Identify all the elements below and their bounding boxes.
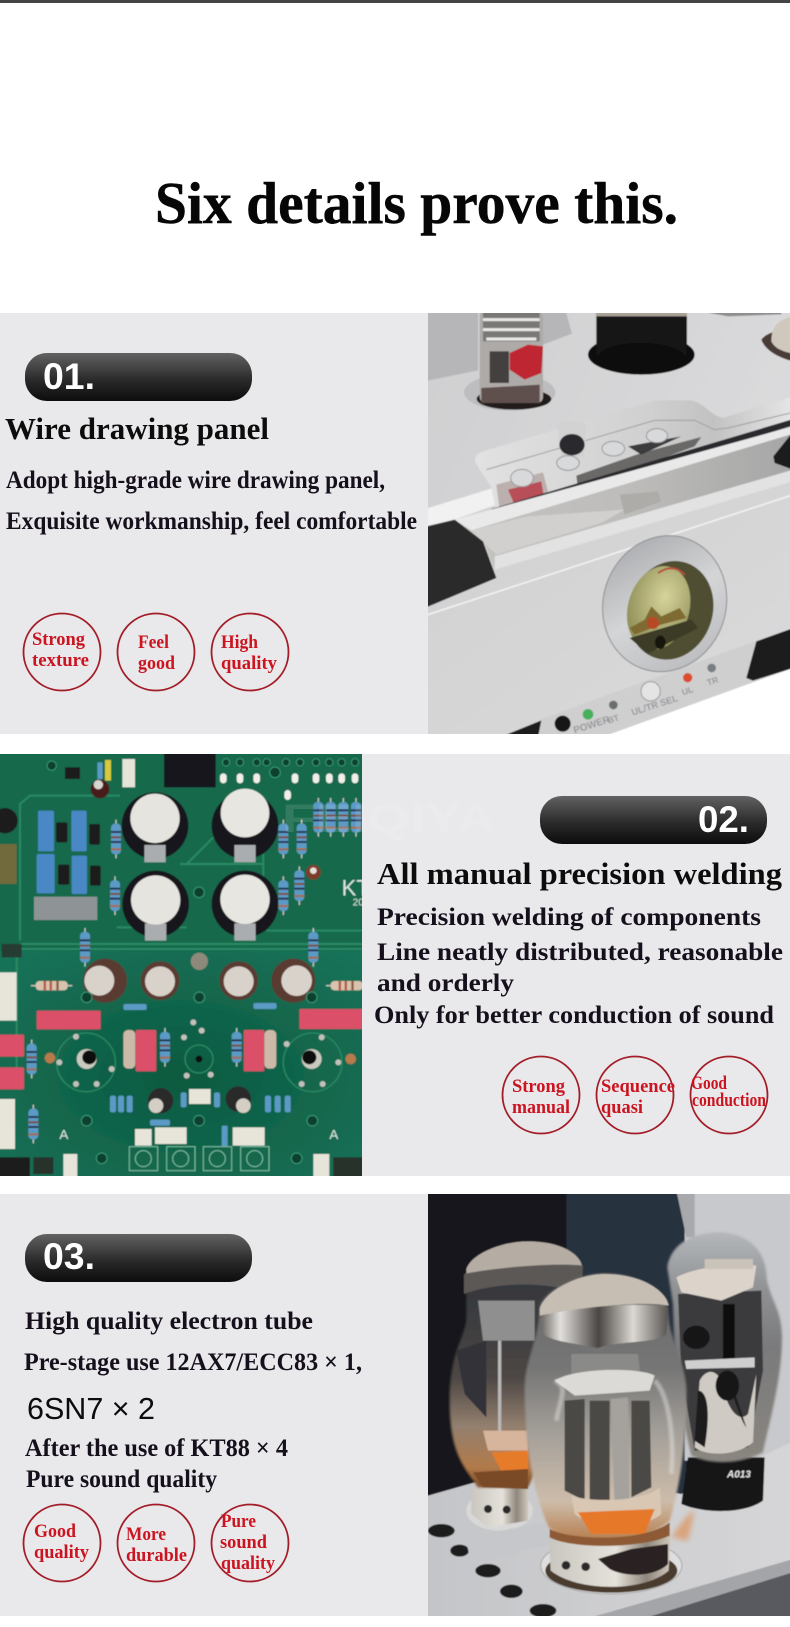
reflection in recess xyxy=(496,472,550,510)
heading: high quality electron tube: High quality electron tube xyxy=(25,1308,313,1335)
icon: white connectors xyxy=(0,759,329,1179)
badge: high quality: quality xyxy=(221,653,277,674)
badge: pure sound quality: Pure xyxy=(221,1511,256,1532)
badge: good conduction: Good xyxy=(691,1073,727,1094)
backdrop xyxy=(425,1191,790,1619)
badge: more durable xyxy=(118,1504,194,1582)
icon: trimmer pots xyxy=(129,1147,269,1171)
badge: feel good xyxy=(118,614,194,690)
tube bracket xyxy=(465,1522,551,1564)
board traces xyxy=(17,796,362,1087)
badge: strong manual: manual xyxy=(512,1097,570,1118)
icon: rear right tube with A013 base: A013 xyxy=(726,1469,751,1480)
badge: strong texture xyxy=(24,614,100,690)
text block: description: Line neatly distributed, reasonable xyxy=(377,939,783,966)
badge: feel good: Feel xyxy=(138,632,169,653)
badge: 01: 01. xyxy=(43,356,95,397)
front panel labels: UL/TR SEL xyxy=(630,693,679,718)
badge: good quality: Good xyxy=(34,1521,76,1542)
badge: 03 xyxy=(25,1234,252,1282)
icon: small preamp tube xyxy=(464,310,555,411)
front panel labels: TR xyxy=(706,674,720,688)
badge: 02 xyxy=(540,796,767,844)
icon: black feet xyxy=(746,628,790,681)
text block: description: Exquisite workmanship, feel comfortable xyxy=(6,508,417,535)
icon: small capacitors xyxy=(0,780,315,1113)
relay xyxy=(164,751,216,787)
photo: amplifier top panel and VU meter xyxy=(425,310,790,737)
silver plate xyxy=(425,1441,790,1619)
badge: 01 xyxy=(25,353,252,401)
badge: strong manual xyxy=(502,1056,580,1134)
front panel labels: UL xyxy=(681,684,695,697)
badge: sequence quasi: Sequence xyxy=(601,1076,675,1097)
gray block xyxy=(34,897,97,920)
board markings: A xyxy=(329,1127,338,1142)
badge: pure sound quality: quality xyxy=(221,1553,275,1574)
control strip xyxy=(538,628,790,737)
text block: tube specification: After the use of KT88 × 4 xyxy=(25,1435,288,1462)
icon: VU meter xyxy=(585,519,744,688)
icon: diodes xyxy=(56,822,101,886)
knob post xyxy=(557,421,585,456)
badge: good conduction: conduction xyxy=(692,1090,766,1111)
badge: strong texture: texture xyxy=(32,650,89,671)
icon: rear left tube xyxy=(450,1241,585,1531)
recessed cutout xyxy=(475,396,790,513)
icon: blue film capacitors xyxy=(37,811,87,894)
badge: sequence quasi: quasi xyxy=(601,1097,643,1118)
plate holes xyxy=(428,1524,556,1617)
text block: tube specification: Pre-stage use 12AX7/ECC83 × 1, xyxy=(24,1349,362,1376)
text block: description: Only for better conduction of sound xyxy=(374,1002,774,1029)
badge: high quality: High xyxy=(221,632,258,653)
black strip xyxy=(491,419,790,515)
badge: sequence quasi xyxy=(596,1056,675,1134)
badge: good conduction xyxy=(690,1056,768,1134)
icon: front centre tube xyxy=(525,1273,686,1594)
badge: pure sound quality xyxy=(212,1504,288,1582)
front panel labels xyxy=(572,674,720,737)
icon: red film capacitors xyxy=(0,1009,365,1089)
badge: more durable: More xyxy=(126,1524,166,1545)
badge: pure sound quality: sound xyxy=(220,1532,267,1553)
board markings: KT xyxy=(342,876,370,901)
badge: strong texture: Strong xyxy=(32,629,85,650)
badge: high quality xyxy=(212,614,288,690)
photo: KT88 vacuum tubes xyxy=(425,1191,790,1619)
badge: more durable: durable xyxy=(126,1545,187,1566)
text block: description: Precision welding of components xyxy=(377,904,761,931)
text block: description: and orderly xyxy=(377,970,515,997)
white corner xyxy=(601,668,790,737)
icon: indicator lamps xyxy=(555,664,716,732)
text block: tube specification xyxy=(24,1349,362,1493)
icon: large capacitors xyxy=(122,789,278,941)
badge: good quality: quality xyxy=(34,1542,89,1563)
board markings: A xyxy=(59,1127,68,1142)
badge: good quality xyxy=(24,1504,100,1582)
text block: description xyxy=(6,467,417,535)
text block: description xyxy=(374,904,783,1029)
badge: strong manual: Strong xyxy=(512,1076,565,1097)
panel: 02 manual welding xyxy=(362,754,790,1176)
chassis corner shade xyxy=(425,310,572,381)
icon: tube sockets xyxy=(45,865,356,1092)
front panel labels: BT xyxy=(606,712,621,726)
text block: tube specification: 6SN7 × 2 xyxy=(27,1391,155,1426)
front panel labels: POWER xyxy=(572,714,611,737)
board markings: 20 xyxy=(353,898,364,909)
front panel xyxy=(425,481,790,737)
mirror rail xyxy=(455,426,790,570)
heading: wire drawing panel: Wire drawing panel xyxy=(5,411,269,446)
heading: all manual precision welding: All manual precision welding xyxy=(377,856,783,891)
black side bar xyxy=(425,520,496,608)
right tube stub xyxy=(761,328,790,361)
ghosted tube highlights xyxy=(555,1381,672,1474)
title: Six details prove this. xyxy=(155,170,678,236)
small ICs xyxy=(65,767,80,779)
icon: rear right tube with A013 base xyxy=(667,1232,782,1511)
plate front edge xyxy=(425,488,496,526)
panel: 03 electron tube xyxy=(0,1194,428,1616)
icon: black transformer tube xyxy=(588,310,695,375)
icon: resistors xyxy=(27,798,367,1146)
icon: solder pads and mounting holes xyxy=(47,759,359,1164)
photo: green circuit board xyxy=(0,751,370,1179)
top rule xyxy=(0,0,790,3)
text block: tube specification: Pure sound quality xyxy=(26,1466,217,1493)
icon: buttons xyxy=(511,429,668,487)
watermark: FEIQIYA xyxy=(282,797,496,841)
badge: 02: 02. xyxy=(698,799,749,840)
badge: feel good: good xyxy=(138,653,175,674)
badge: 03: 03. xyxy=(43,1236,95,1277)
text block: description: Adopt high-grade wire drawing panel, xyxy=(6,467,385,494)
panel: 01 wire drawing panel xyxy=(0,313,428,734)
board markings xyxy=(59,876,370,1142)
